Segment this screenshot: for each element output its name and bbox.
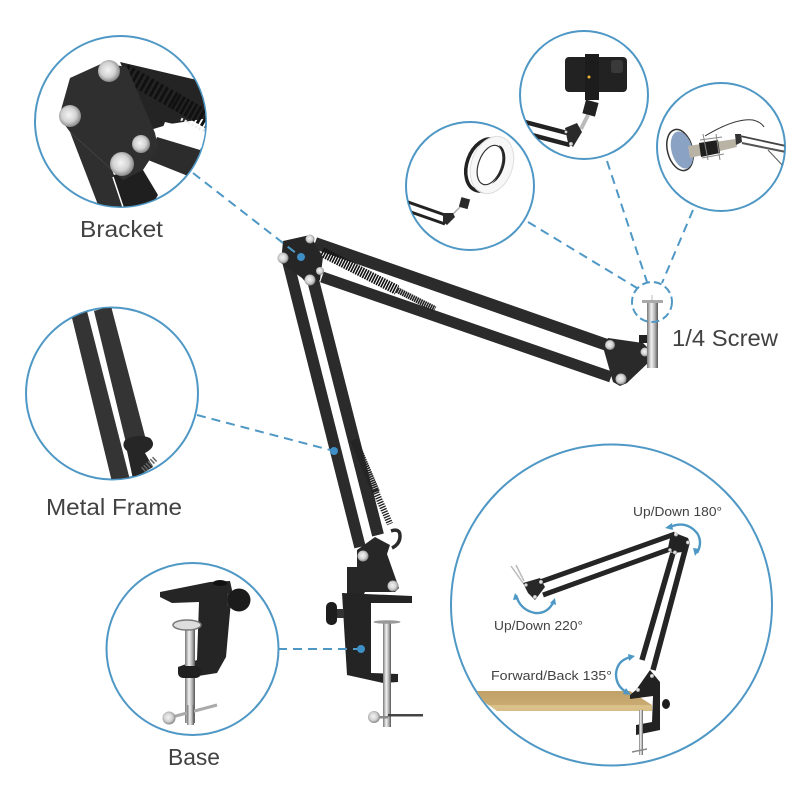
pivot bolts: [358, 550, 398, 592]
mini top plate: [668, 533, 690, 553]
top bracket plate: [281, 235, 323, 287]
mini end plate: [523, 578, 545, 600]
connector: metal frame callout line: [197, 415, 334, 451]
connector: bracket callout line: [193, 173, 301, 257]
connector: microphone line: [662, 210, 693, 283]
mini screw post: [511, 565, 524, 583]
connector: ring light line: [528, 222, 637, 288]
clamp knob: [326, 602, 344, 625]
right upright bar: [313, 280, 378, 535]
upper arm bar: [315, 243, 607, 345]
mini clamp screw: [632, 710, 647, 755]
mini clamp: [630, 670, 660, 735]
arm spring: [322, 252, 435, 309]
panel: bracket detail: [35, 36, 210, 210]
arrow: up down 220: [513, 593, 556, 613]
panel: base detail: [106, 563, 278, 735]
phone and arm image: [525, 54, 627, 147]
lower arm bar: [322, 277, 611, 377]
end plate bolts: [605, 340, 650, 384]
label: Bracket: Bracket: [80, 216, 164, 242]
mini bolts: [524, 532, 690, 692]
ring light and arm image: [408, 136, 514, 226]
desk mounted boom arm: [470, 532, 690, 755]
base clamp close-up image: [160, 580, 250, 725]
frame close-up image: [72, 306, 156, 482]
dashed circle around screw: [632, 282, 672, 322]
marker dot: bracket: [297, 253, 305, 261]
quarter inch screw post: [639, 295, 663, 368]
panel: metal frame detail: [26, 306, 198, 482]
arrow: forward back 135: [616, 654, 635, 695]
connector: base callout line: [278, 648, 361, 650]
upright spring: [354, 440, 390, 524]
desk clamp body: [342, 593, 412, 683]
bracket bolts: [278, 234, 324, 286]
panel: microphone use: [657, 83, 786, 211]
left upright bar: [288, 262, 360, 547]
label: Base: Base: [168, 744, 220, 770]
marker dot: metal frame: [330, 447, 338, 455]
spring hook: [391, 530, 400, 548]
right end plate: [603, 338, 652, 386]
wooden desktop: [470, 691, 652, 711]
clamp screw: [368, 620, 423, 727]
panel: phone holder use: [520, 31, 648, 159]
main boom arm: [278, 234, 663, 727]
label: Up/Down 220: Up/Down 220°: [494, 619, 583, 633]
label: 1/4 Screw: 1/4 Screw: [672, 325, 778, 351]
arrow: up down 180: [665, 523, 700, 556]
label: Metal Frame: Metal Frame: [46, 494, 182, 520]
mini clamp knob: [662, 699, 670, 709]
label: Forward/Back 135: Forward/Back 135°: [491, 669, 612, 683]
marker dot: base: [357, 645, 365, 653]
bracket close-up image: [59, 60, 210, 210]
label: Up/Down 180: Up/Down 180°: [633, 505, 722, 519]
microphone and arm image: [662, 120, 786, 174]
panel: adjustment range: [451, 444, 772, 766]
mini arm bars: [540, 534, 687, 670]
connector: phone holder line: [607, 161, 647, 282]
lower pivot bracket: [347, 537, 399, 596]
panel: ring light use: [405, 122, 534, 250]
